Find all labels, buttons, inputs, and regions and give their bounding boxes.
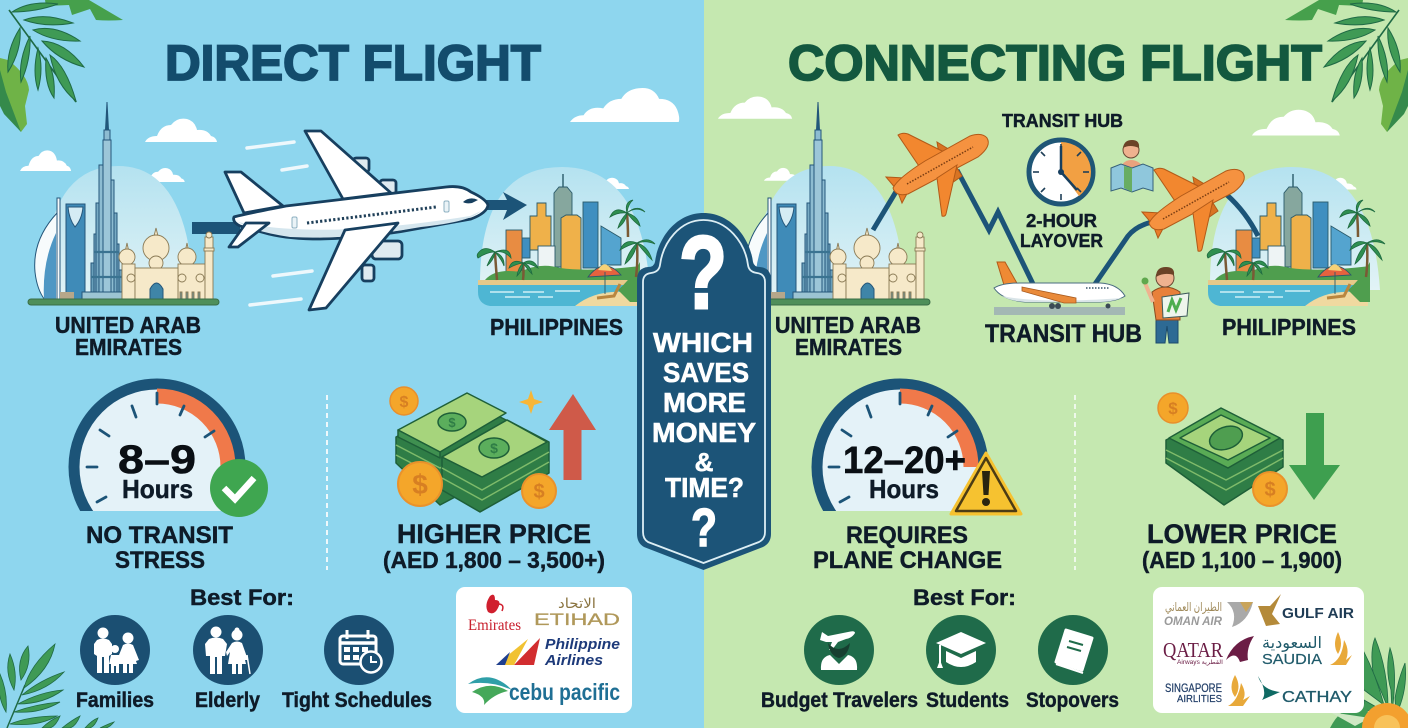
route: connecting flight path bbox=[873, 170, 1258, 284]
badge question text bbox=[652, 327, 756, 503]
badge question text: SAVES bbox=[663, 357, 749, 388]
panel: connecting airlines card bbox=[1153, 587, 1364, 713]
labels: audience connecting bbox=[761, 689, 1119, 712]
icon: budget travelers bbox=[804, 615, 874, 685]
logo: saudia: SAUDIA bbox=[1262, 651, 1322, 668]
label: lower price: (AED 1,100 – 1,900) bbox=[1142, 547, 1342, 573]
gauge: connecting flight duration: Hours bbox=[869, 474, 939, 504]
big question mark: ? bbox=[679, 215, 727, 330]
labels: audience direct bbox=[76, 689, 432, 712]
logo: emirates: Emirates bbox=[468, 617, 521, 634]
icon: backpacker with map bbox=[1142, 267, 1189, 343]
badge question text: MONEY bbox=[652, 417, 756, 448]
gauge: direct flight duration bbox=[68, 378, 268, 517]
arrow: price down bbox=[1289, 413, 1340, 500]
clouds: connecting side bbox=[718, 97, 1357, 190]
route arrow: direct destination bbox=[470, 192, 527, 220]
labels: audience connecting: Budget Travelers bbox=[761, 689, 918, 712]
icon: cash stack lower price bbox=[1166, 408, 1283, 505]
icon: parked plane bbox=[994, 262, 1125, 315]
label: United Arab Emirates left bbox=[55, 312, 201, 360]
divider bbox=[326, 395, 328, 570]
illustration: Philippines skyline left bbox=[477, 167, 655, 306]
icon: families bbox=[80, 615, 150, 685]
icon: coin bottom: $ bbox=[1264, 479, 1276, 501]
icon: cash stacks higher price: $ bbox=[448, 415, 456, 430]
label: two hour layover bbox=[1020, 211, 1103, 251]
label: two hour layover: 2-HOUR bbox=[1026, 211, 1097, 231]
foliage: top right leaves bbox=[1285, 0, 1408, 132]
logo: cathay bbox=[1258, 676, 1352, 706]
label: United Arab Emirates right: EMIRATES bbox=[795, 334, 902, 360]
callout: center badge bbox=[637, 213, 771, 570]
gauge text: 12–20+ bbox=[843, 440, 966, 482]
icon: green check bbox=[210, 459, 268, 517]
logo: gulf air: GULF AIR bbox=[1282, 605, 1354, 622]
background: connecting flight panel bbox=[704, 0, 1408, 728]
foliage: bottom left frond bbox=[0, 644, 114, 728]
logo: saudia bbox=[1262, 632, 1352, 668]
icon: sparkle bbox=[519, 390, 543, 414]
icon: tight schedules bbox=[324, 615, 394, 685]
icon: large coin bbox=[398, 462, 442, 506]
label: transit hub bottom: TRANSIT HUB bbox=[985, 320, 1142, 348]
logo: emirates bbox=[468, 595, 521, 634]
label: higher price: (AED 1,800 – 3,500+) bbox=[383, 547, 605, 573]
badge question text: & bbox=[695, 447, 713, 477]
logo: oman air bbox=[1164, 600, 1253, 628]
labels: audience direct: Families bbox=[76, 689, 154, 712]
badge question text: MORE bbox=[663, 387, 746, 418]
label: requires plane change: PLANE CHANGE bbox=[813, 547, 1002, 574]
icon: large coin: $ bbox=[412, 469, 428, 500]
speed lines bbox=[247, 142, 312, 305]
logo: singapore airlines: AIRLITIES bbox=[1177, 693, 1222, 705]
logo: qatar airways: QATAR bbox=[1163, 638, 1223, 662]
label: best for direct: Best For: bbox=[190, 585, 294, 610]
clouds: direct side bbox=[20, 88, 679, 189]
foliage: bottom right frond and flower bbox=[1330, 638, 1408, 728]
illustration: Philippines skyline right bbox=[1207, 167, 1385, 306]
title: connecting flight: CONNECTING FLIGHT bbox=[788, 35, 1322, 91]
label: higher price bbox=[383, 519, 605, 573]
icon: right coin: $ bbox=[533, 481, 545, 503]
icon: stopovers book bbox=[1038, 615, 1108, 685]
icon: orange plane one bbox=[886, 133, 988, 216]
label: no transit stress bbox=[86, 522, 233, 574]
label: United Arab Emirates right bbox=[775, 312, 921, 360]
label: requires plane change: REQUIRES bbox=[846, 522, 968, 549]
gauge: connecting flight duration bbox=[812, 378, 1022, 516]
badge question text: WHICH bbox=[653, 327, 753, 358]
label: no transit stress: NO TRANSIT bbox=[86, 522, 233, 549]
icon: right coin bbox=[522, 474, 556, 508]
labels: audience direct: Elderly bbox=[195, 689, 260, 712]
logo: oman air: الطيران العماني bbox=[1165, 600, 1222, 615]
icon: coin bottom bbox=[1253, 472, 1287, 506]
divider bbox=[1074, 395, 1076, 570]
illustration: UAE skyline left bbox=[28, 102, 219, 305]
logo: saudia: السعودية bbox=[1262, 635, 1322, 653]
logo: philippine airlines: Philippine bbox=[545, 636, 620, 653]
badge question text: TIME? bbox=[665, 472, 744, 503]
label: United Arab Emirates right: UNITED ARAB bbox=[775, 312, 921, 338]
icon: layover clock bbox=[1029, 140, 1093, 204]
label: two hour layover: LAYOVER bbox=[1020, 231, 1103, 251]
logo: singapore airlines bbox=[1165, 675, 1250, 706]
label: lower price bbox=[1142, 519, 1342, 573]
background: direct flight panel bbox=[0, 0, 704, 728]
foliage: top left leaves bbox=[0, 0, 123, 132]
icon: students bbox=[926, 615, 996, 685]
icon: coin top bbox=[1158, 393, 1188, 423]
logo: cathay: CATHAY bbox=[1282, 689, 1352, 706]
gauge text: 8–9 bbox=[118, 438, 196, 482]
label: no transit stress: STRESS bbox=[115, 547, 205, 574]
logo: etihad: ETIHAD bbox=[534, 610, 620, 629]
icon: orange plane two bbox=[1142, 168, 1244, 251]
illustration: UAE skyline right bbox=[739, 102, 930, 305]
label: best for connecting: Best For: bbox=[913, 585, 1016, 610]
label: requires plane change bbox=[813, 522, 1002, 574]
logo: qatar airways bbox=[1163, 636, 1254, 666]
arrow: price up bbox=[549, 394, 596, 480]
logo: singapore airlines: SINGAPORE bbox=[1165, 683, 1222, 695]
labels: audience connecting: Stopovers bbox=[1026, 689, 1119, 712]
logo: gulf air bbox=[1258, 594, 1354, 626]
icon: elderly bbox=[193, 615, 263, 685]
logo: etihad: الاتحاد bbox=[558, 595, 596, 611]
title: direct flight: DIRECT FLIGHT bbox=[165, 35, 541, 91]
icon: white airplane bbox=[225, 131, 488, 310]
icon: warning triangle bbox=[951, 453, 1021, 514]
logo: philippine airlines bbox=[496, 636, 620, 669]
labels: audience direct: Tight Schedules bbox=[282, 689, 432, 712]
label: lower price: LOWER PRICE bbox=[1147, 519, 1337, 549]
icon: small coin top bbox=[390, 387, 418, 415]
logo: cebu pacific: cebu pacific bbox=[509, 679, 620, 705]
icon: cash stacks higher price bbox=[396, 393, 549, 512]
label: United Arab Emirates left: UNITED ARAB bbox=[55, 312, 201, 338]
panel: direct airlines card bbox=[456, 587, 632, 713]
label: higher price: HIGHER PRICE bbox=[397, 519, 591, 549]
icon: small coin top: $ bbox=[400, 394, 409, 411]
logo: oman air: OMAN AIR bbox=[1164, 616, 1223, 628]
logo: etihad bbox=[534, 595, 620, 629]
gauge: direct flight duration: Hours bbox=[122, 474, 193, 504]
logo: philippine airlines: Airlines bbox=[544, 652, 603, 669]
small question mark: ? bbox=[691, 498, 717, 558]
icon: cash stacks higher price: $ bbox=[490, 440, 498, 456]
icon: traveller with map bbox=[1111, 140, 1153, 192]
route bar: direct origin bbox=[192, 222, 240, 234]
logo: cebu pacific bbox=[468, 677, 620, 705]
label: Philippines right: PHILIPPINES bbox=[1222, 314, 1356, 340]
icon: coin top: $ bbox=[1168, 399, 1178, 418]
label: United Arab Emirates left: EMIRATES bbox=[75, 334, 182, 360]
labels: audience connecting: Students bbox=[926, 689, 1009, 712]
label: transit hub top: TRANSIT HUB bbox=[1002, 111, 1123, 131]
label: Philippines left: PHILIPPINES bbox=[490, 314, 623, 340]
logo: qatar airways: Airways القطرية bbox=[1177, 659, 1223, 666]
